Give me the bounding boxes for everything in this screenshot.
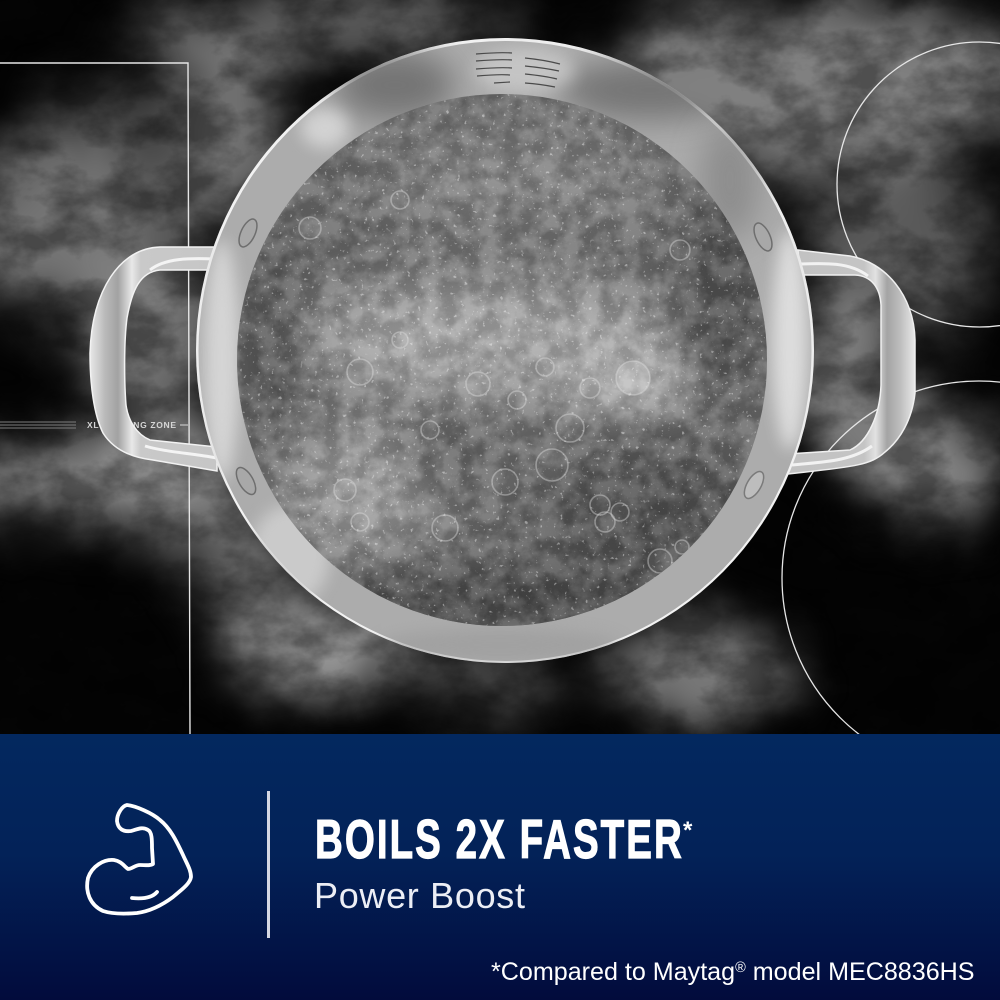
steam clouds <box>0 0 1000 734</box>
cooking zone outline <box>0 42 1000 775</box>
headline asterisk: * <box>683 817 693 844</box>
water <box>230 90 775 635</box>
cooktop background with steam <box>0 0 1000 775</box>
rivets <box>232 216 776 501</box>
headline: BOILS 2X FASTER <box>315 809 682 871</box>
footnote: *Compared to Maytag <box>491 958 735 986</box>
pot right handle <box>788 250 915 474</box>
measurement marks <box>476 53 560 87</box>
label: XL cooking zone: XL COOKING ZONE <box>87 420 176 430</box>
pot body <box>196 38 814 663</box>
divider <box>267 791 270 938</box>
subheading: Power Boost <box>314 875 525 916</box>
info band <box>0 734 1000 1000</box>
pot left handle <box>90 247 217 471</box>
rim shading <box>204 48 808 661</box>
steam texture <box>0 0 1000 734</box>
bubbles <box>299 191 690 573</box>
footnote: ® <box>735 960 746 976</box>
footnote: model MEC8836HS <box>746 958 975 986</box>
icon: flexed arm <box>87 805 191 914</box>
label: XL cooking zone <box>0 422 188 428</box>
